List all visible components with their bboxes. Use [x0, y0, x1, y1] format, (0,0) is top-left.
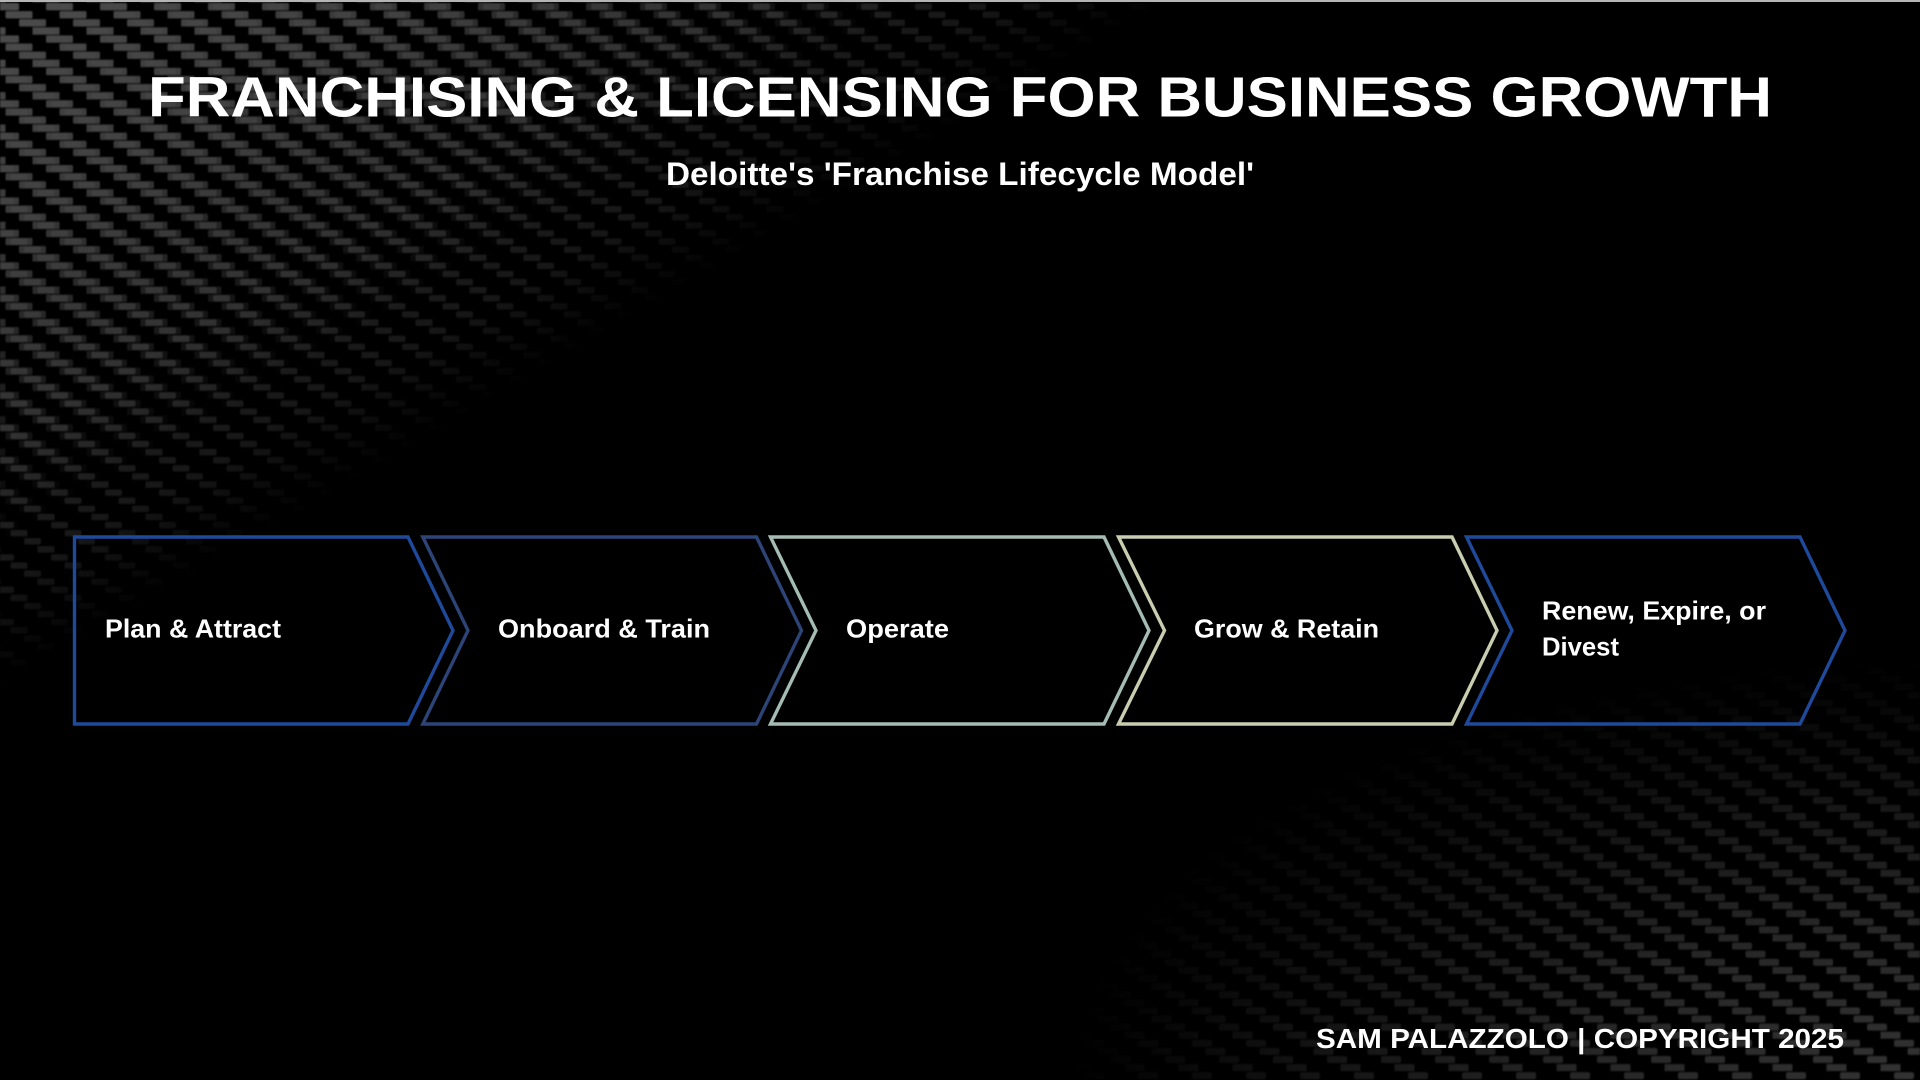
carbon fibre texture: top left — [0, 2, 828, 502]
step 5: Renew, Expire, or Divest: Renew, Expire, or — [1542, 596, 1766, 626]
step 4: Grow & Retain — [1118, 537, 1497, 724]
copyright footer: SAM PALAZZOLO | COPYRIGHT 2025 — [1316, 1023, 1844, 1054]
step 3: Operate: Operate — [846, 614, 949, 644]
carbon fibre texture: bottom right — [1178, 712, 1920, 1080]
step 2: Onboard & Train — [423, 537, 802, 724]
subtitle: Deloitte's 'Franchise Lifecycle Model' — [666, 156, 1254, 192]
title: FRANCHISING & LICENSING FOR BUSINESS GROWTH — [148, 66, 1772, 130]
step 4: Grow & Retain: Grow & Retain — [1194, 614, 1379, 644]
process chevrons — [74, 537, 1845, 724]
step 1: Plan & Attract: Plan & Attract — [105, 614, 281, 644]
step 5: Renew, Expire, or Divest: Divest — [1542, 632, 1619, 662]
step 2: Onboard & Train: Onboard & Train — [498, 614, 710, 644]
step 5: Renew, Expire, or Divest — [1466, 537, 1845, 724]
step 3: Operate — [770, 537, 1149, 724]
step 1: Plan & Attract — [74, 537, 453, 724]
carbon fibre texture: top left fading dots — [0, 2, 1093, 637]
